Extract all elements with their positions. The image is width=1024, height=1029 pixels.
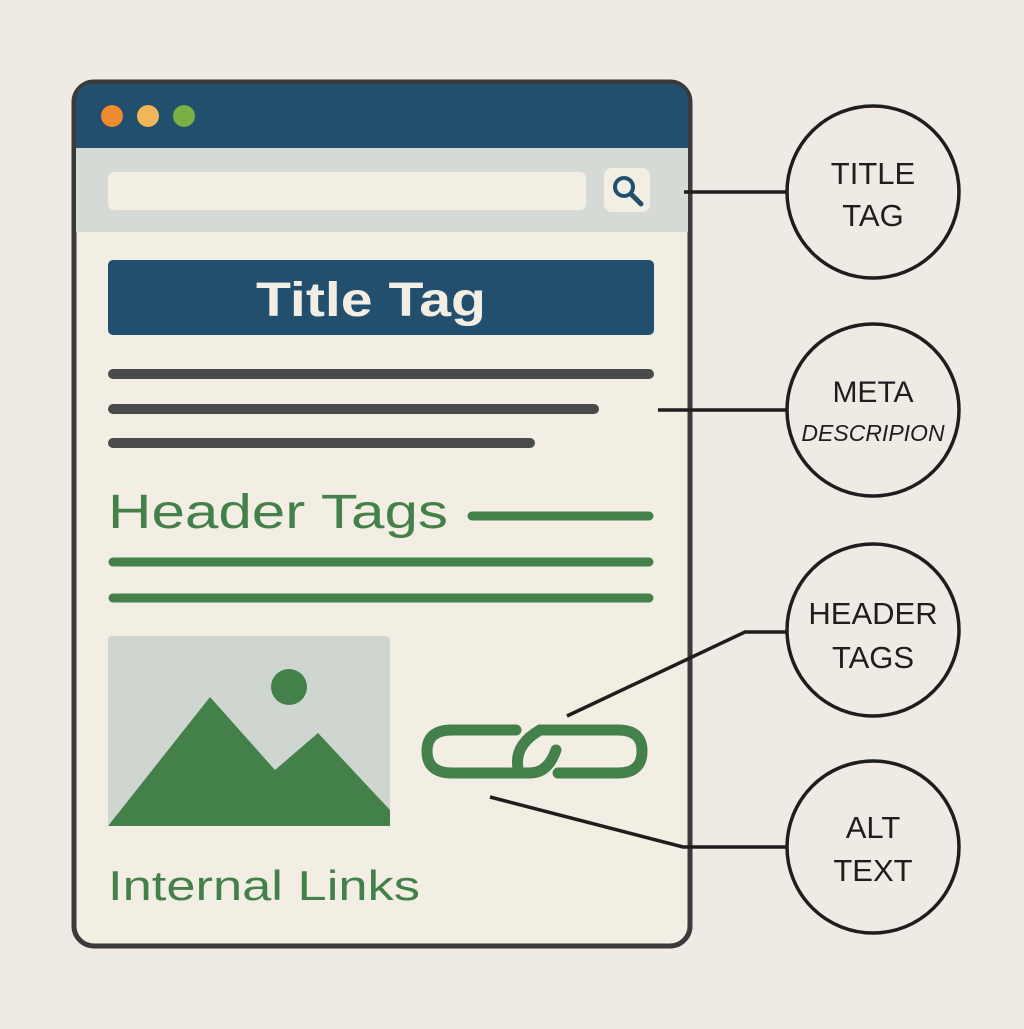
callout: alt text: TEXT (833, 853, 913, 888)
callout: meta description: META (832, 376, 914, 409)
image placeholder (108, 636, 390, 826)
callout: alt text (787, 761, 959, 933)
callout: header tags: TAGS (832, 640, 914, 675)
callout: meta description (787, 324, 959, 496)
title tag bar: Title Tag (256, 274, 486, 327)
callout: alt text: ALT (846, 810, 900, 845)
callout: meta description: DESCRIPION (801, 420, 945, 446)
callout: header tags: HEADER (808, 596, 938, 631)
internal links label: Internal Links (108, 862, 420, 909)
connector lines (490, 192, 787, 847)
browser window (74, 82, 690, 946)
header tags text: Header Tags (108, 486, 448, 539)
callout: title tag (787, 106, 959, 278)
callout: title tag: TAG (842, 198, 904, 233)
search area (76, 148, 688, 232)
header bar (76, 84, 688, 148)
title tag bar (108, 260, 654, 335)
callout: title tag: TITLE (831, 156, 915, 191)
icon: chain link (427, 730, 642, 773)
window dots (101, 105, 195, 127)
meta text lines (113, 374, 649, 443)
callout: header tags (787, 544, 959, 716)
